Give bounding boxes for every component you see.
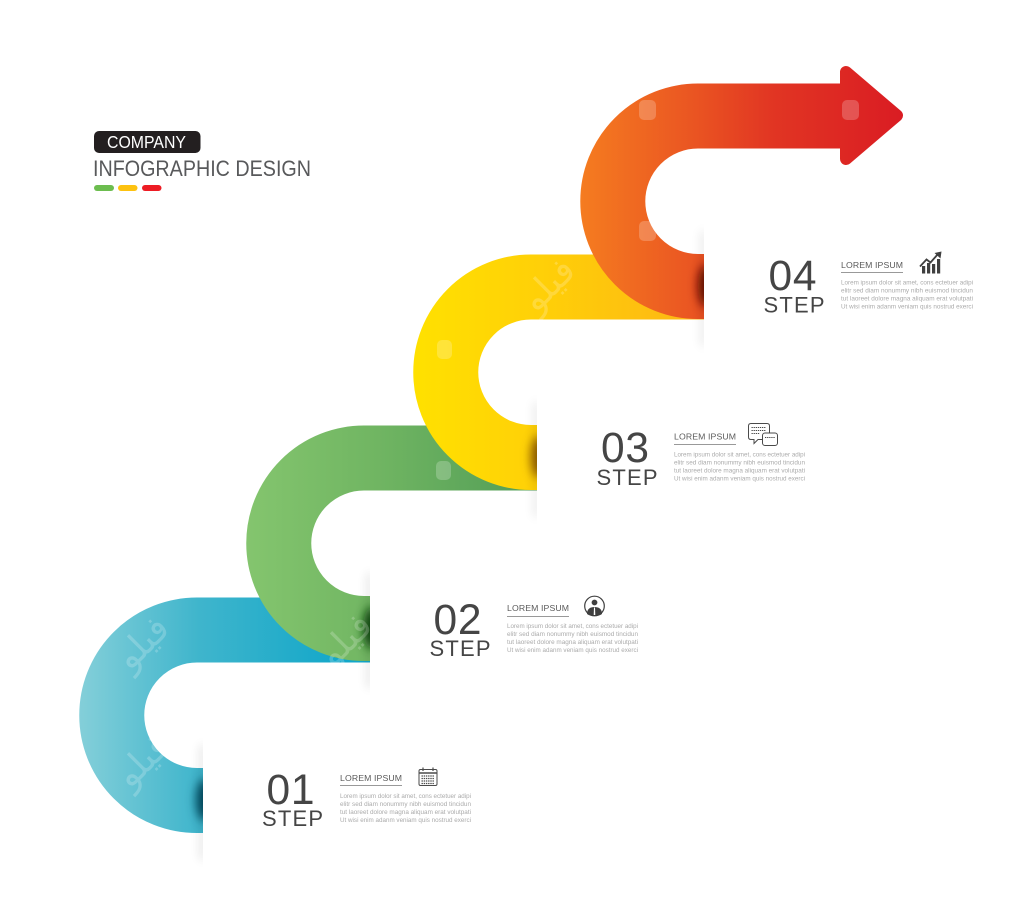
step number: 03 <box>601 425 649 472</box>
body text: Ut wisi enim adanm veniam quis nostrud exerci <box>507 647 638 654</box>
body text: elitr sed diam nonummy nibh euismod tincidun <box>340 801 471 808</box>
watermark: فيلو <box>105 607 178 680</box>
icon: chat bubbles <box>748 424 778 446</box>
body text: elitr sed diam nonummy nibh euismod tincidun <box>507 631 638 638</box>
step number: 02 <box>434 597 482 644</box>
watermark logo <box>436 461 451 480</box>
icon: growth chart <box>920 252 942 274</box>
heading: infographic design: INFOGRAPHIC DESIGN <box>93 156 311 181</box>
panel: step 02 <box>430 596 638 661</box>
body text: Lorem ipsum dolor sit amet, cons ectetuer adipi <box>507 623 638 630</box>
watermark: فيلو <box>105 725 178 798</box>
body text: Ut wisi enim adanm veniam quis nostrud exerci <box>841 304 973 310</box>
body text <box>340 793 471 824</box>
body text: tut laoreet dolore magna aliquam erat volutpati <box>841 296 973 302</box>
watermark: فيلو <box>511 249 584 322</box>
ribbon: step 1 blue <box>105 607 383 870</box>
heading: LOREM IPSUM <box>674 432 736 442</box>
step number: 04 <box>768 253 816 300</box>
heading: LOREM IPSUM <box>340 773 402 783</box>
watermark logo <box>842 100 859 120</box>
icon: person <box>585 596 604 616</box>
watermark: فيلو <box>308 604 381 677</box>
body text: Lorem ipsum dolor sit amet, cons ectetuer adipi <box>340 793 471 800</box>
body text <box>674 452 805 482</box>
arrow head <box>846 72 897 159</box>
body text: tut laoreet dolore magna aliquam erat volutpati <box>674 468 805 474</box>
company badge: COMPANY <box>107 132 186 152</box>
step number: 01 <box>266 767 314 814</box>
body text: Ut wisi enim adanm veniam quis nostrud exerci <box>340 817 471 824</box>
watermark logo <box>639 221 656 241</box>
watermark logo <box>639 100 656 120</box>
icon: calendar <box>419 768 437 786</box>
body text: elitr sed diam nonummy nibh euismod tincidun <box>841 288 973 294</box>
ribbon: step 2 green <box>279 458 550 698</box>
ribbon: step 4 arrow <box>613 72 897 356</box>
body text: Ut wisi enim adanm veniam quis nostrud exerci <box>674 476 805 482</box>
heading: LOREM IPSUM <box>841 260 903 270</box>
body text <box>841 280 973 310</box>
step label: STEP <box>262 806 323 831</box>
body text: Lorem ipsum dolor sit amet, cons ectetuer adipi <box>841 280 973 286</box>
body text: tut laoreet dolore magna aliquam erat volutpati <box>507 639 638 646</box>
step label: STEP <box>764 292 824 318</box>
panel: step 03 <box>596 424 805 490</box>
body text: tut laoreet dolore magna aliquam erat volutpati <box>340 809 471 816</box>
step label: STEP <box>596 465 658 490</box>
ribbon: step 3 yellow <box>446 287 717 527</box>
header: company title block <box>93 131 311 191</box>
body text <box>507 623 638 654</box>
body text: elitr sed diam nonummy nibh euismod tincidun <box>674 460 805 466</box>
body text: Lorem ipsum dolor sit amet, cons ectetuer adipi <box>674 452 805 458</box>
panel: step 04 <box>764 252 973 318</box>
watermark logo <box>437 340 452 359</box>
step label: STEP <box>430 636 490 661</box>
heading: LOREM IPSUM <box>507 603 569 613</box>
panel: step 01 <box>262 767 471 831</box>
colour pills <box>94 185 162 191</box>
